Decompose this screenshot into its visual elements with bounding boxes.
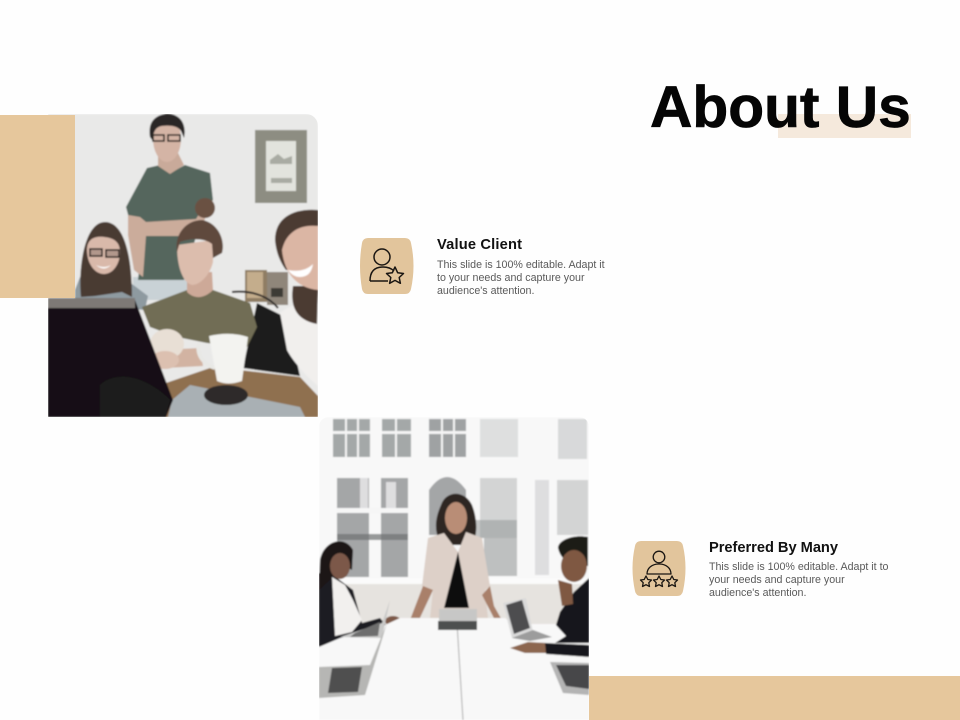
feature: value client	[360, 237, 605, 297]
tan block behind photo	[0, 115, 75, 298]
wall under window	[346, 584, 582, 624]
upper windows	[333, 419, 587, 459]
standing man	[126, 114, 213, 300]
tan bottom bar	[589, 676, 960, 720]
black chair	[232, 292, 300, 376]
tablet on table	[438, 609, 477, 630]
right woman's arm	[510, 642, 589, 657]
body text	[437, 259, 605, 297]
icon: user with star	[360, 238, 414, 294]
black laptop	[48, 298, 173, 417]
centre woman	[410, 494, 503, 624]
photo: team around a laptop	[48, 114, 318, 417]
feature: preferred by many	[632, 540, 889, 599]
photo: women at a meeting table	[319, 417, 589, 720]
heading: Preferred By Many	[709, 540, 839, 556]
body text: This slide is 100% editable. Adapt it to	[709, 561, 889, 573]
body text: audience's attention.	[437, 285, 534, 297]
body text: audience's attention.	[709, 587, 806, 599]
left woman	[319, 541, 401, 647]
white table	[384, 616, 508, 627]
icon: user with three stars	[632, 541, 686, 596]
body text	[709, 561, 889, 599]
smiling woman on right	[275, 210, 318, 386]
table	[160, 367, 318, 417]
laptops	[319, 598, 589, 698]
right woman	[555, 536, 589, 643]
title highlight	[778, 114, 911, 138]
lower windows	[337, 477, 588, 577]
framed picture	[255, 130, 307, 203]
body text: This slide is 100% editable. Adapt it	[437, 259, 605, 271]
body text: your needs and capture your	[709, 574, 845, 586]
heading: Value Client	[437, 237, 522, 253]
woman with bun	[142, 198, 257, 369]
white mug	[198, 334, 248, 384]
papers and mouse	[168, 385, 305, 417]
title: About Us	[650, 75, 911, 140]
shelf items	[245, 270, 288, 305]
body text: to your needs and capture your	[437, 272, 585, 284]
woman with glasses	[75, 222, 148, 310]
